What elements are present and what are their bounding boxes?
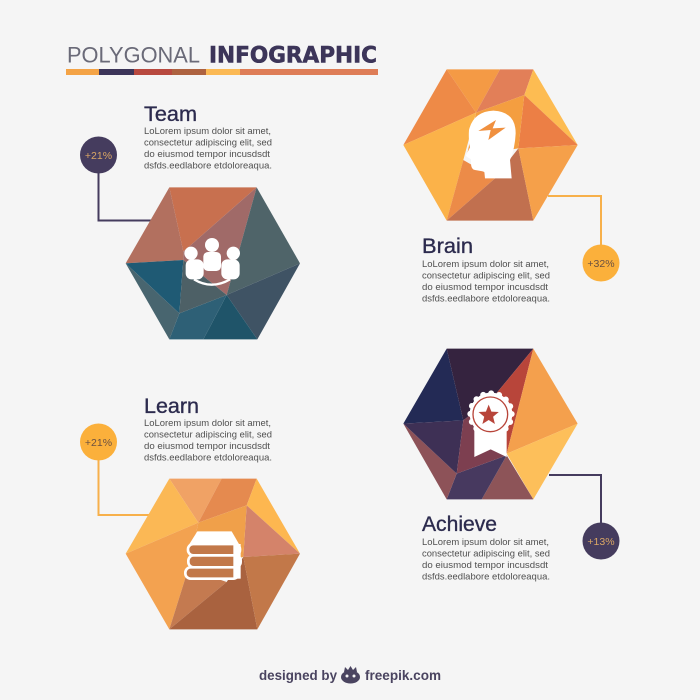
achieve body text: do eiusmod tempor incusdsdt xyxy=(422,560,548,571)
learn body text: LoLorem ipsum dolor sit amet, xyxy=(144,418,271,429)
achieve body text: LoLorem ipsum dolor sit amet, xyxy=(422,537,549,548)
icon: award rosette xyxy=(470,393,512,457)
team body text xyxy=(144,126,272,172)
icon: freepik logo xyxy=(341,666,360,684)
achieve percentage badge xyxy=(582,522,620,560)
achieve percentage badge: +13% xyxy=(587,536,615,548)
achieve polygon hexagon xyxy=(403,349,578,499)
achieve body text: dsfds.eedlabore etdoloreaqua. xyxy=(422,572,550,582)
learn heading: Learn xyxy=(144,394,199,418)
panel: team xyxy=(80,102,300,339)
panel: achieve xyxy=(403,349,620,582)
brain percentage badge xyxy=(582,244,620,282)
title: POLYGONAL xyxy=(67,42,200,68)
footer credit: freepik.com xyxy=(365,668,441,683)
achieve heading: Achieve xyxy=(422,512,497,536)
learn percentage badge: +21% xyxy=(85,437,112,449)
team percentage badge xyxy=(80,136,117,174)
learn body text: consectetur adipiscing elit, sed xyxy=(144,430,272,440)
achieve connector line xyxy=(549,475,601,526)
panel: learn xyxy=(80,394,300,629)
team body text: consectetur adipiscing elit, sed xyxy=(144,138,272,148)
brain heading: Brain xyxy=(422,234,473,258)
learn connector line xyxy=(98,458,150,515)
brain body text: LoLorem ipsum dolor sit amet, xyxy=(422,259,549,270)
brain polygon hexagon xyxy=(403,69,578,221)
icon: head with lightning bolt xyxy=(466,111,516,178)
brain body text: dsfds.eedlabore etdoloreaqua. xyxy=(422,294,550,304)
team body text: do eiusmod tempor incusdsdt xyxy=(144,149,270,160)
team body text: dsfds.eedlabore etdoloreaqua. xyxy=(144,160,272,172)
team connector line xyxy=(98,170,152,220)
team body text: LoLorem ipsum dolor sit amet, xyxy=(144,126,271,137)
brain body text: consectetur adipiscing elit, sed xyxy=(422,270,550,282)
learn body text: do eiusmod tempor incusdsdt xyxy=(144,441,270,452)
icon: stack of books xyxy=(185,531,241,579)
footer credit: designed by xyxy=(259,668,337,683)
team polygon hexagon xyxy=(126,187,300,339)
title xyxy=(67,42,377,68)
icon: team people xyxy=(184,238,240,285)
title: INFOGRAPHIC xyxy=(209,42,377,68)
title colour bar xyxy=(66,69,378,75)
brain body text xyxy=(422,259,550,304)
panel: brain xyxy=(403,69,620,304)
learn polygon hexagon xyxy=(126,479,300,629)
brain body text: do eiusmod tempor incusdsdt xyxy=(422,282,548,293)
learn percentage badge xyxy=(80,424,117,460)
achieve body text xyxy=(422,537,550,582)
achieve body text: consectetur adipiscing elit, sed xyxy=(422,548,550,560)
footer credit xyxy=(259,666,441,684)
team heading: Team xyxy=(144,102,197,126)
learn body text xyxy=(144,418,272,464)
brain connector line xyxy=(548,196,601,248)
learn body text: dsfds.eedlabore etdoloreaqua. xyxy=(144,452,272,464)
brain percentage badge: +32% xyxy=(587,258,615,270)
team percentage badge: +21% xyxy=(85,150,112,162)
